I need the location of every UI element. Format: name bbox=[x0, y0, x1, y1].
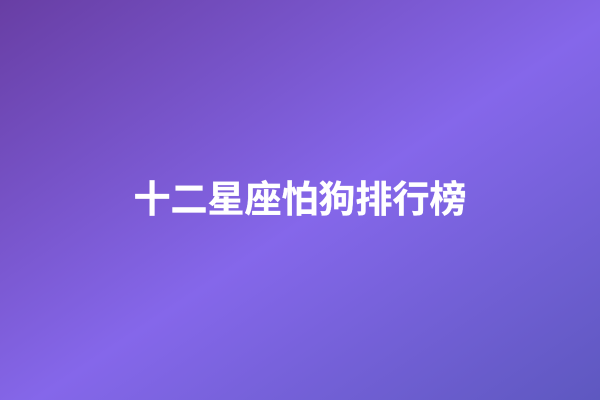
title: 十二星座怕狗排行榜 bbox=[134, 179, 466, 220]
